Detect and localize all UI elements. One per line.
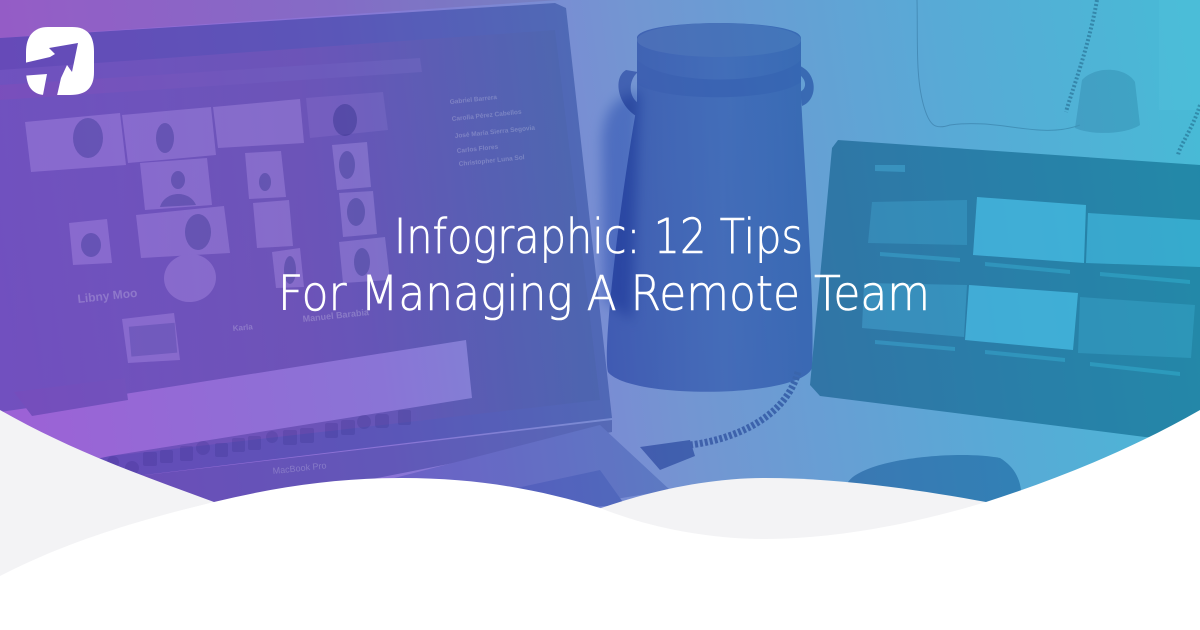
faint screen labels from the photo: Gabriel Barrera xyxy=(449,94,498,106)
tablet xyxy=(810,140,1200,440)
title xyxy=(278,209,930,322)
tablet caption lines xyxy=(875,252,1190,376)
faint screen labels from the photo: Carlos Flores xyxy=(456,144,499,155)
faces in thumbnails xyxy=(73,104,370,357)
laptop base xyxy=(340,425,670,505)
bright wall panel xyxy=(1159,0,1200,110)
faint screen labels from the photo: José María Sierra Segovia xyxy=(454,125,536,140)
faint screen labels from the photo: Libny Moo xyxy=(77,286,138,306)
title: Infographic: 12 Tips xyxy=(394,209,803,265)
dock xyxy=(107,410,411,475)
photo: desk scene xyxy=(0,0,640,480)
logo xyxy=(26,27,94,95)
laptop lid xyxy=(0,3,612,480)
watch xyxy=(848,455,1021,510)
faint screen labels from the photo xyxy=(77,94,536,476)
laptop deck below screen xyxy=(120,420,612,505)
faint screen labels from the photo: Karla xyxy=(232,322,254,333)
faint screen labels from the photo: MacBook Pro xyxy=(272,460,327,476)
wave: white foreground xyxy=(0,410,1200,630)
title: For Managing A Remote Team xyxy=(278,266,930,322)
wave: grey left xyxy=(0,410,214,600)
speaker shadow xyxy=(602,92,640,320)
faint screen labels from the photo: Manuel Barabia xyxy=(302,307,370,324)
speaker xyxy=(607,23,814,392)
tablet thumbnails xyxy=(862,0,1200,376)
wave: grey centre xyxy=(590,478,990,545)
video thumbnails xyxy=(25,92,390,363)
light panel xyxy=(0,340,472,480)
chat popup xyxy=(14,378,128,416)
wall shading xyxy=(0,0,560,38)
faint screen labels from the photo: Carolla Pérez Cabellos xyxy=(451,109,522,123)
laptop top bar xyxy=(0,58,422,100)
faint screen labels from the photo: Christopher Luna Sol xyxy=(458,154,525,168)
screen xyxy=(0,30,600,455)
cable xyxy=(690,372,798,445)
jar and cables on the wall xyxy=(917,0,1200,155)
